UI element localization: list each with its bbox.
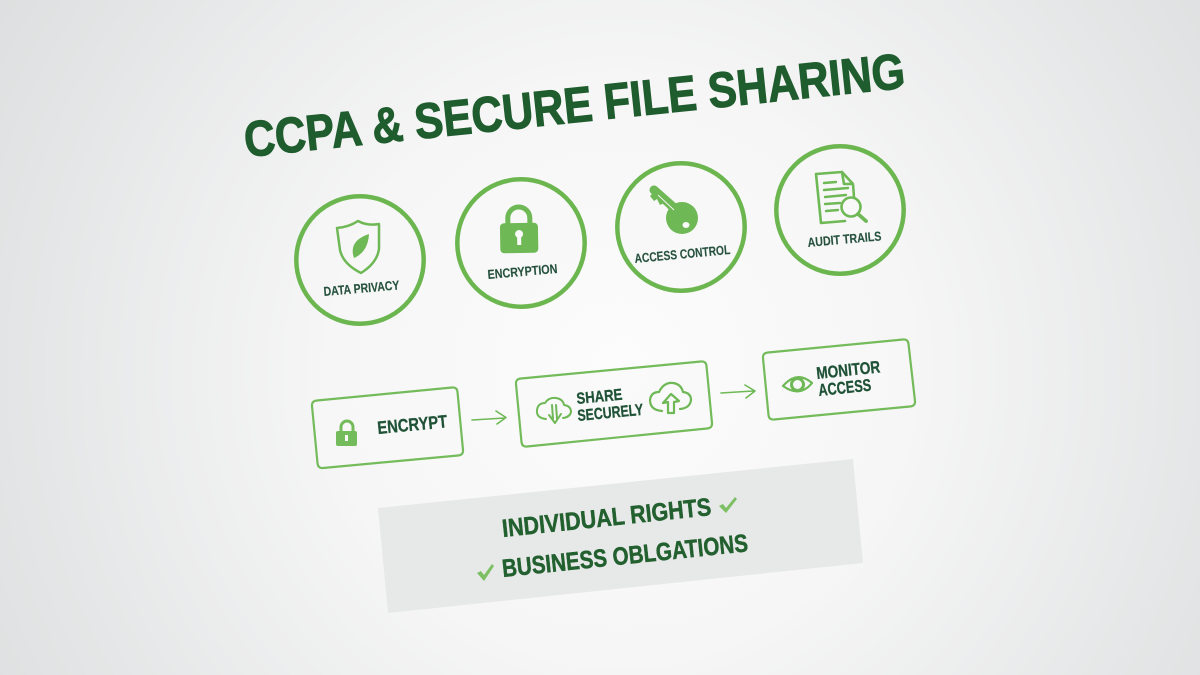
icon: eye [783, 377, 812, 391]
arrow [721, 385, 755, 398]
title: CCPA & SECURE FILE SHARING [241, 43, 908, 168]
step: encrypt [312, 387, 463, 468]
arrow [472, 411, 506, 424]
label: share securely: SECURELY [577, 402, 644, 425]
icon: cloud download [537, 398, 571, 423]
label: encrypt: ENCRYPT [376, 411, 448, 438]
label: encryption: ENCRYPTION [487, 261, 558, 282]
step: monitor access [763, 339, 915, 420]
icon: document with magnifier [816, 172, 866, 223]
icon: padlock [500, 207, 538, 253]
icon: check [719, 497, 737, 513]
label: monitor access [815, 357, 881, 400]
panel: encryption [457, 179, 585, 307]
icon: small padlock [336, 421, 357, 446]
label: audit trails: AUDIT TRAILS [807, 228, 882, 250]
panel: access control [617, 163, 745, 291]
icon: cloud upload [650, 383, 691, 413]
label: business obligations: BUSINESS OBLGATIONS [501, 529, 749, 583]
icon: shield with leaf [337, 221, 379, 273]
icon: check [477, 564, 494, 581]
panel: data privacy [296, 196, 424, 324]
label: data privacy: DATA PRIVACY [323, 277, 400, 299]
label: individual rights: INDIVIDUAL RIGHTS [501, 493, 712, 543]
panel: audit trails [776, 146, 904, 274]
icon: key [650, 190, 698, 234]
label: share securely [576, 387, 644, 425]
label: share securely: SHARE [576, 387, 623, 408]
step: share securely [516, 361, 712, 447]
label: monitor access: ACCESS [817, 376, 872, 400]
label: monitor access: MONITOR [815, 357, 881, 383]
panel: rights and obligations [378, 459, 863, 613]
label: access control: ACCESS CONTROL [634, 242, 731, 266]
